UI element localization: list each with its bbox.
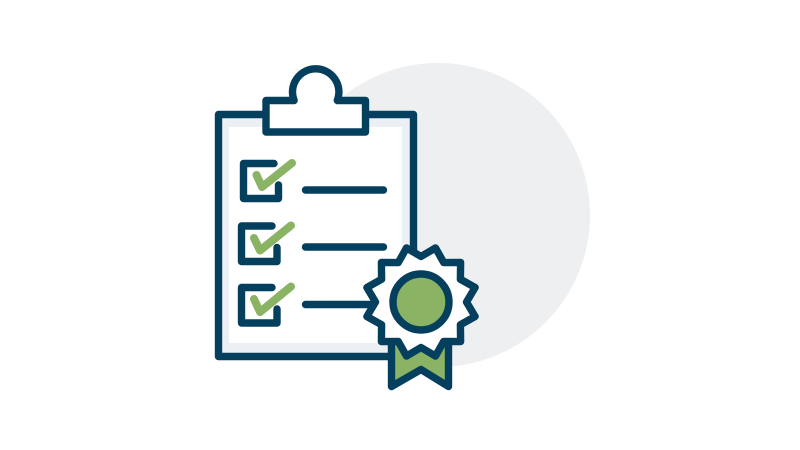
clipboard <box>218 69 414 357</box>
check mark 3 <box>254 286 291 312</box>
checkbox 1 <box>244 164 278 198</box>
checklist item 1 <box>244 163 384 198</box>
text line 3 <box>306 301 375 308</box>
rosette <box>367 248 475 356</box>
text line 2 <box>306 243 384 251</box>
checklist item 3 <box>242 286 375 323</box>
check mark 2 <box>254 226 291 250</box>
checkbox 2 <box>242 226 277 262</box>
background circle <box>286 63 590 367</box>
clipboard board <box>218 114 414 356</box>
award badge <box>367 248 475 386</box>
badge centre <box>393 274 449 330</box>
ribbon <box>392 335 448 386</box>
clipboard clip <box>266 69 366 132</box>
text line 1 <box>306 186 384 194</box>
checkbox 3 <box>242 288 277 323</box>
check mark 1 <box>256 163 292 187</box>
paper sheet <box>229 127 402 343</box>
checklist item 2 <box>242 226 384 262</box>
